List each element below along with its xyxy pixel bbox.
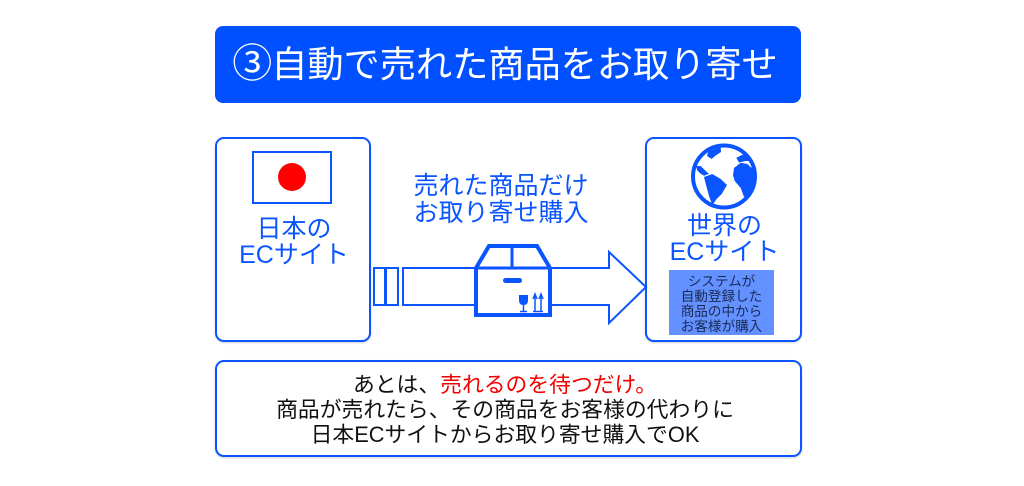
summary text: 日本ECサイトからお取り寄せ購入でOK [311, 422, 699, 447]
panel: summary callout [215, 360, 802, 457]
title text: ③自動で売れた商品をお取り寄せ [232, 42, 778, 86]
panel heading [670, 212, 779, 266]
arrow: purchase flow [373, 250, 648, 326]
title banner [215, 26, 801, 103]
arrow label: 売れた商品だけ [413, 172, 588, 200]
icon: globe [691, 144, 757, 210]
panel: Japanese EC site [215, 137, 371, 342]
summary text: 商品が売れたら、その商品をお客様の代わりに [276, 397, 734, 422]
note text: システムが [688, 274, 755, 289]
note box [669, 270, 774, 335]
panel heading: ECサイト [239, 241, 349, 269]
note text: お客様が購入 [681, 319, 762, 334]
summary text: あとは、売れるのを待つだけ。 [353, 372, 657, 397]
panel heading [239, 215, 349, 269]
panel heading: 日本の [256, 215, 332, 243]
arrow label [413, 172, 588, 226]
panel: world EC site [645, 137, 802, 342]
icon: Japanese flag [252, 151, 332, 204]
note text: 自動登録した [681, 289, 762, 304]
summary text [276, 372, 734, 447]
panel heading: ECサイト [670, 238, 779, 266]
note text: 商品の中から [681, 304, 762, 319]
icon: cardboard box [474, 244, 552, 317]
arrow label: お取り寄せ購入 [413, 198, 588, 226]
note text [681, 274, 762, 334]
panel heading: 世界の [687, 212, 762, 240]
